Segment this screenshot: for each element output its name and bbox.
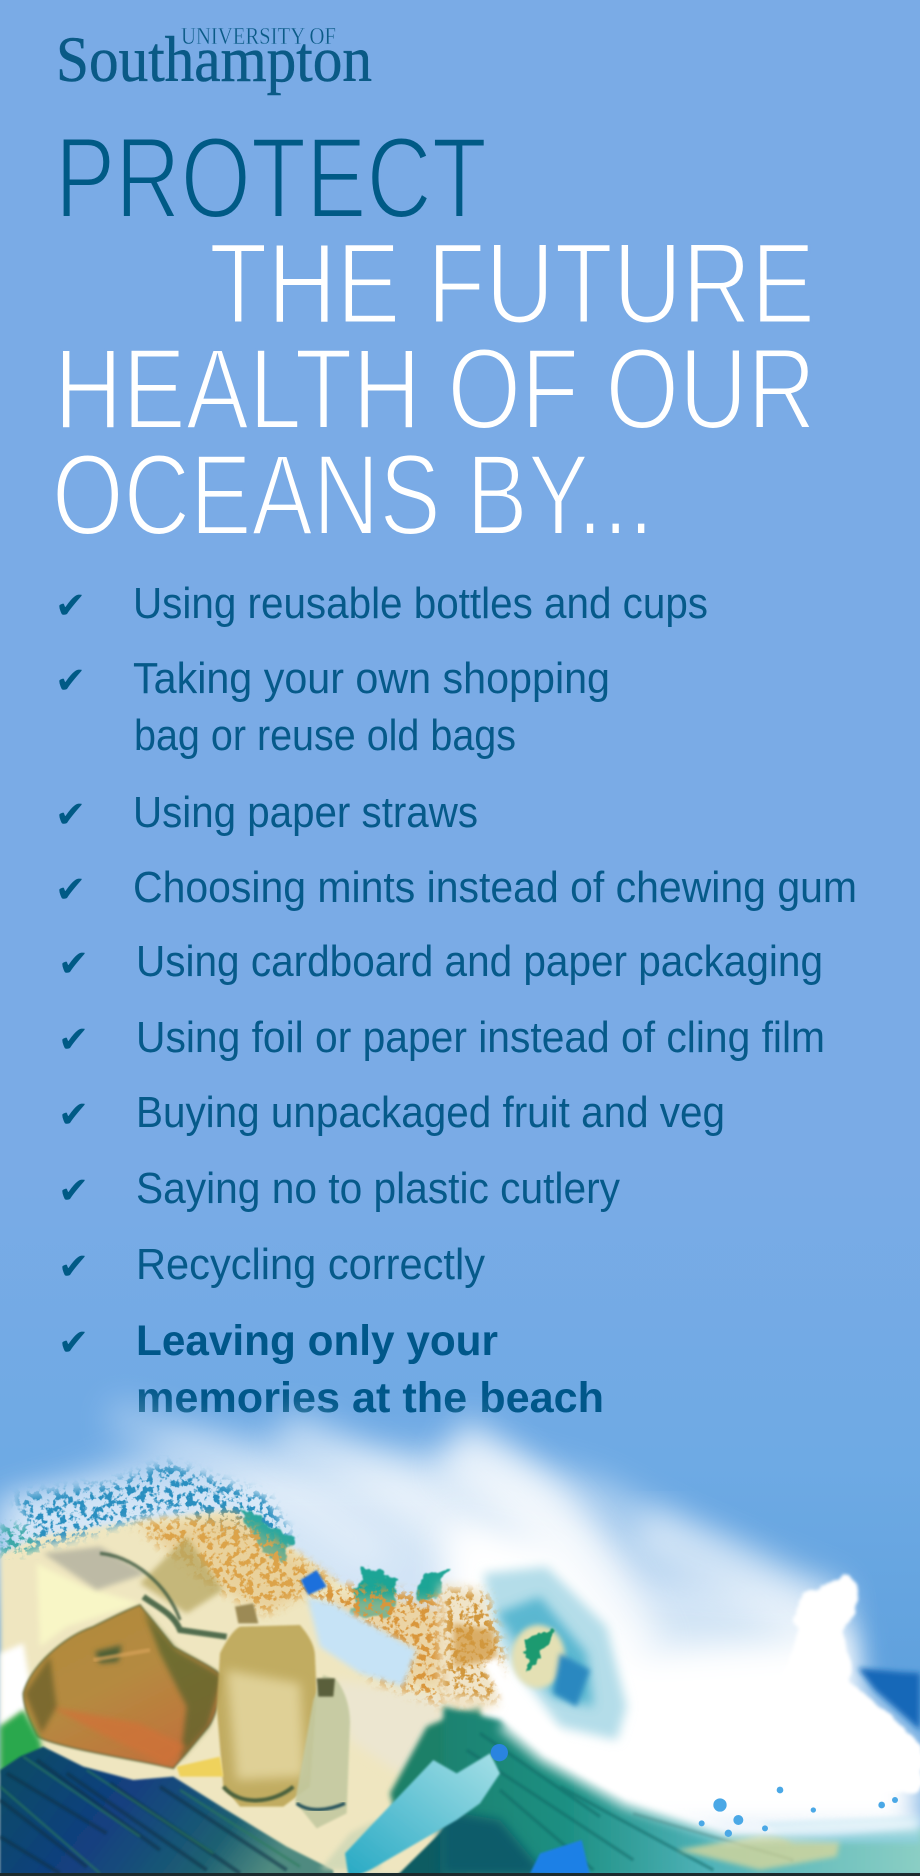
item: paper straws: ✔ — [55, 793, 86, 836]
spray haze — [0, 1415, 920, 1840]
title: THE FUTURE — [209, 220, 815, 348]
item: shopping bag: bag or reuse old bags — [134, 711, 516, 760]
bottom edge — [0, 1873, 920, 1876]
item: foil: ✔ — [58, 1018, 89, 1061]
cyan bottle — [345, 1744, 508, 1876]
soft white edge of the foam — [503, 1723, 920, 1832]
title: PROTECT — [55, 114, 487, 242]
logo: University of Southampton: Southampton — [56, 24, 372, 96]
item: unpackaged fruit: ✔ — [58, 1093, 89, 1136]
orange speckles — [133, 1513, 480, 1713]
orange speckle cluster — [443, 1590, 503, 1700]
teal and blue splashes — [0, 1463, 447, 1620]
item: shopping bag: Taking your own shopping — [133, 654, 610, 703]
cream plastic base — [0, 1510, 480, 1876]
lower water strip — [440, 1707, 920, 1876]
item: paper straws: Using paper straws — [133, 788, 478, 837]
dark blue brushed water — [0, 1747, 333, 1876]
ocean behind the wave — [858, 1668, 920, 1730]
upright bottle — [295, 1675, 350, 1828]
item: shopping bag: ✔ — [55, 659, 86, 702]
item: foil: Using foil or paper instead of cling film — [136, 1013, 825, 1062]
item: recycling: Recycling correctly — [136, 1240, 485, 1289]
debris left half — [0, 1463, 480, 1876]
green patch — [0, 1710, 43, 1773]
green hatch and dark teal — [320, 1703, 480, 1876]
title: OCEANS BY... — [52, 432, 654, 560]
item: cutlery: ✔ — [58, 1169, 89, 1212]
item: recycling: ✔ — [58, 1245, 89, 1288]
item: reusable bottles: ✔ — [55, 584, 86, 627]
square plastic bottle — [177, 1603, 317, 1807]
item: leaving only memories: ✔ — [58, 1321, 89, 1364]
item: unpackaged fruit: Buying unpackaged fruit and veg — [136, 1088, 725, 1137]
item: shopping bag — [55, 654, 610, 760]
brown bag — [23, 1605, 223, 1768]
title — [52, 114, 816, 560]
transition of plastic into foam — [440, 1583, 503, 1717]
wave and debris right half — [345, 1567, 920, 1876]
item: mints: ✔ — [55, 868, 86, 911]
checklist — [55, 579, 857, 1422]
item: leaving only memories: Leaving only your — [136, 1317, 498, 1365]
blue plastic cup — [530, 1840, 590, 1875]
item: reusable bottles: Using reusable bottles and cups — [133, 579, 708, 628]
logo: University of Southampton: UNIVERSITY OF — [181, 24, 336, 50]
curl of the wave — [483, 1567, 627, 1740]
item: cardboard: ✔ — [58, 942, 89, 985]
item: cardboard: Using cardboard and paper packaging — [136, 937, 823, 986]
pale blue bottle — [301, 1570, 417, 1687]
item: mints: Choosing mints instead of chewing gum — [133, 863, 857, 912]
illustration: wave of plastic waste — [0, 1415, 920, 1876]
item: leaving only memories — [58, 1317, 604, 1422]
white foam arc — [490, 1660, 633, 1790]
blue splash dots — [699, 1787, 898, 1837]
item: cutlery: Saying no to plastic cutlery — [136, 1164, 620, 1213]
translucent bag and cup — [43, 1537, 227, 1637]
item: leaving only memories: memories at the beach — [136, 1374, 604, 1422]
